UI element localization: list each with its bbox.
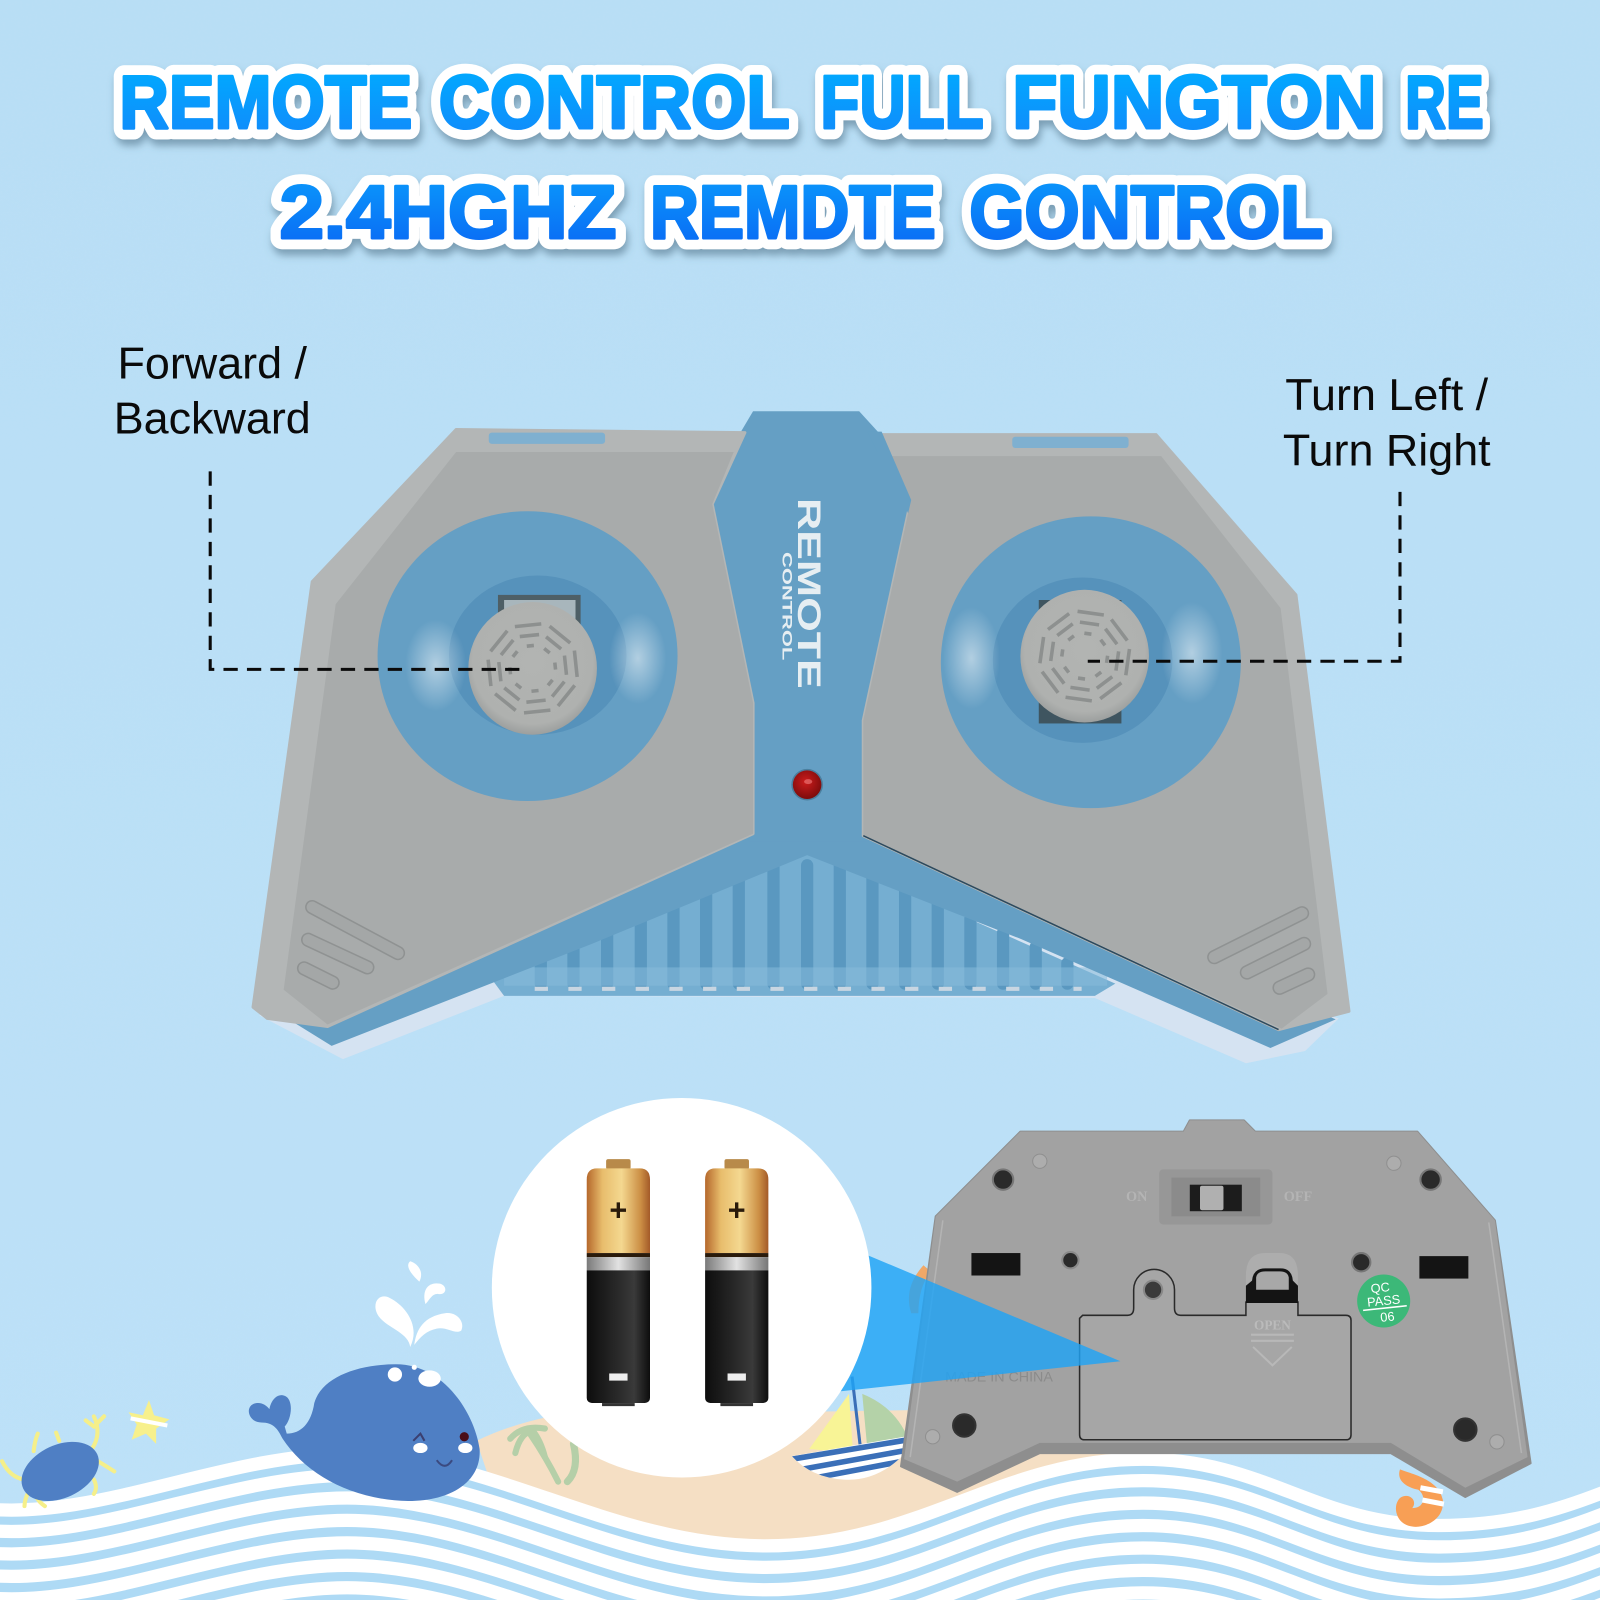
title outline: RE xyxy=(1405,61,1484,145)
made in china mark: MADE IN CHINA xyxy=(945,1370,1053,1386)
power switch xyxy=(1126,1169,1313,1224)
icon: crab xyxy=(2,1416,114,1513)
title outline: REMDTE xyxy=(650,171,936,255)
battery right: + xyxy=(728,1193,746,1227)
title line 1: FUNGTON xyxy=(1012,61,1377,145)
battery circle xyxy=(492,1098,871,1478)
title outline: FUNGTON xyxy=(1012,61,1377,145)
vent ribs xyxy=(493,847,1115,996)
center label: CONTROL xyxy=(779,552,795,661)
title outline: FULL xyxy=(820,61,984,145)
QC pass sticker xyxy=(1357,1274,1410,1328)
left wing grip lines xyxy=(304,907,398,983)
square holes xyxy=(971,1253,1468,1279)
QC pass sticker: QC xyxy=(1370,1279,1391,1296)
battery right xyxy=(705,1159,768,1406)
left joystick xyxy=(378,511,678,801)
center label: REMOTE xyxy=(791,498,828,689)
icon: whale water spout xyxy=(375,1261,462,1347)
power switch: OFF xyxy=(1284,1189,1313,1205)
center label xyxy=(779,498,828,689)
battery latch xyxy=(1246,1253,1298,1303)
blue strip xyxy=(272,816,1336,1048)
callout: turn left / turn right: Turn Right xyxy=(1283,424,1491,475)
icon: whale xyxy=(249,1364,480,1501)
title outline xyxy=(119,61,1484,255)
right joystick xyxy=(941,516,1241,808)
callout: forward / backward: Forward / xyxy=(117,338,308,389)
sea waves xyxy=(0,1454,1600,1600)
icon: palm trees xyxy=(510,1428,576,1482)
icon: seahorse xyxy=(1396,1469,1444,1527)
underside edge xyxy=(259,918,1339,1063)
battery door xyxy=(1080,1269,1351,1440)
icon: starfish xyxy=(129,1400,169,1444)
battery door: OPEN xyxy=(1254,1318,1291,1333)
pointer beam from batteries xyxy=(816,1234,1120,1394)
title line 1: REMOTE xyxy=(119,61,412,145)
side bevel lines xyxy=(910,1220,1521,1457)
title line 1 xyxy=(119,61,1484,145)
right wing xyxy=(863,432,1349,1030)
power switch: ON xyxy=(1126,1189,1148,1205)
callout: turn left / turn right xyxy=(1088,369,1491,661)
title xyxy=(119,61,1484,255)
left wing xyxy=(253,430,753,1027)
title line 2: REMDTE xyxy=(650,171,936,255)
title line 1: RE xyxy=(1405,61,1484,145)
QC pass sticker: PASS xyxy=(1366,1291,1401,1310)
title outline: 2.4HGHZ xyxy=(280,171,616,255)
title line 2 xyxy=(280,171,1323,255)
callout: forward / backward xyxy=(114,338,522,669)
umbrella peeking behind the back remote xyxy=(909,1265,931,1313)
battery left xyxy=(587,1159,650,1406)
title outline: GONTROL xyxy=(969,171,1323,255)
title line 2: GONTROL xyxy=(969,171,1323,255)
callout: turn left / turn right: Turn Left / xyxy=(1285,369,1489,420)
column over wing tops xyxy=(867,432,911,513)
title outline: REMOTE xyxy=(119,61,412,145)
back of remote controller xyxy=(901,1120,1531,1497)
callout: forward / backward: Backward xyxy=(114,393,311,444)
screws xyxy=(953,1169,1477,1441)
QC pass sticker: 06 xyxy=(1380,1308,1395,1325)
title line 1: FULL xyxy=(820,61,984,145)
LED indicator xyxy=(791,769,823,801)
icon: sailboat xyxy=(786,1377,910,1480)
beach island xyxy=(477,1408,1173,1548)
right wing grip lines xyxy=(1214,913,1308,988)
top buttons xyxy=(489,433,1129,448)
battery left: + xyxy=(609,1193,627,1227)
title outline: CONTROL xyxy=(439,61,790,145)
main remote controller xyxy=(253,411,1349,1063)
title line 2: 2.4HGHZ xyxy=(280,171,616,255)
title line 1: CONTROL xyxy=(439,61,790,145)
mounting bumps xyxy=(926,1154,1504,1449)
center column xyxy=(708,411,913,842)
